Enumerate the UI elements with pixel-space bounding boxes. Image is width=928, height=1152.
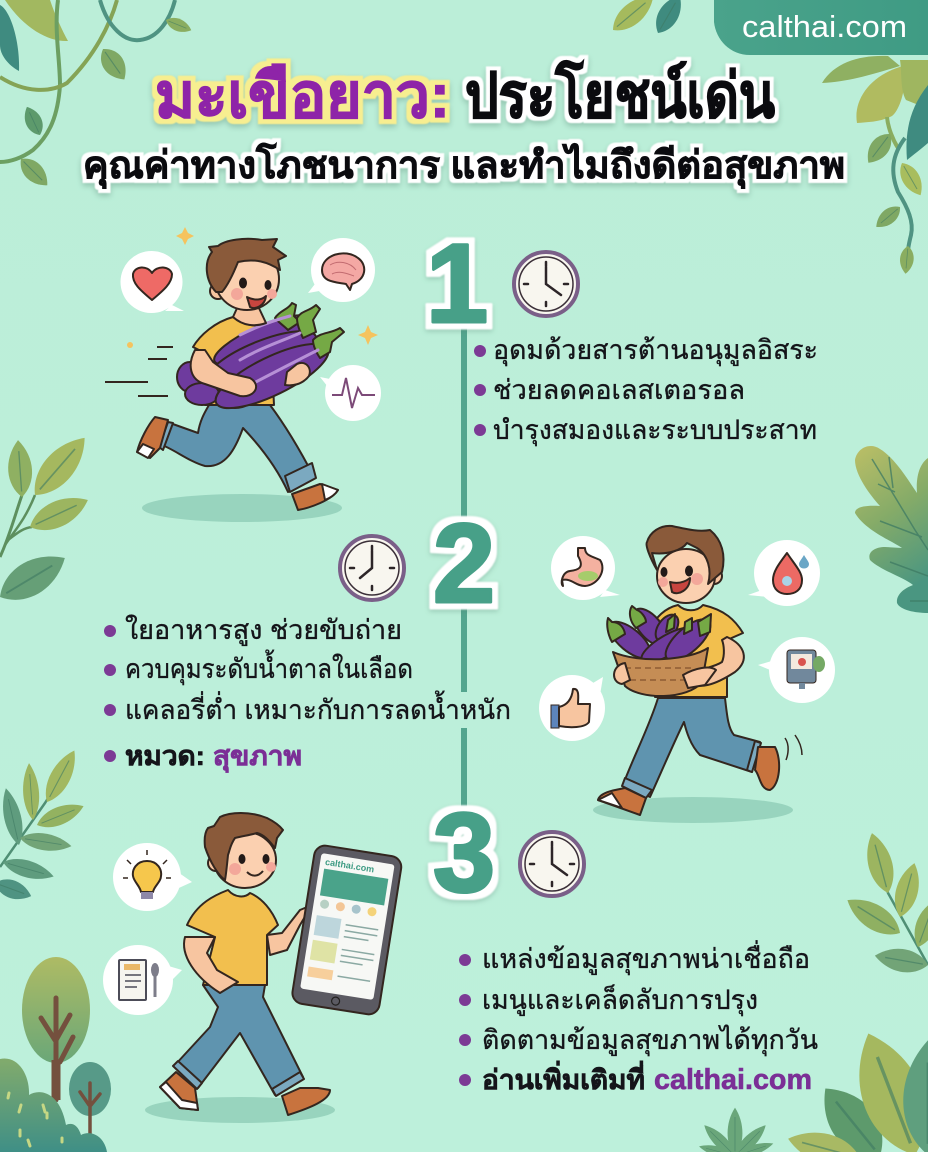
foliage: middle left <box>0 428 96 611</box>
bubble: glucose meter <box>758 637 835 703</box>
section 3 bullets: ติดตามข้อมูลสุขภาพได้ทุกวัน <box>482 1025 818 1057</box>
bubble: light bulb <box>113 843 192 911</box>
bubble: pulse <box>320 365 381 421</box>
foliage: top left vines <box>0 0 194 192</box>
section 2 number: 2 <box>433 501 495 626</box>
brand tab: calthai.com <box>742 9 907 44</box>
section 3 clock <box>520 832 584 896</box>
bubble: recipe book <box>103 945 182 1015</box>
section 2 clock <box>340 536 404 600</box>
title: ประโยชน์เด่น <box>465 59 775 131</box>
sparkles <box>127 227 378 348</box>
bubble: blood drop <box>748 540 820 606</box>
phone <box>291 844 403 1016</box>
section 3 bullets: calthai.com <box>654 1064 812 1096</box>
section 3 bullets: แหล่งข้อมูลสุขภาพน่าเชื่อถือ <box>482 940 810 976</box>
illustration: boy running with eggplants <box>105 227 381 522</box>
bubble: stomach <box>551 536 620 600</box>
title <box>155 59 775 131</box>
subtitle: คุณค่าทางโภชนาการ และทำไมถึงดีต่อสุขภาพ <box>83 142 845 189</box>
bubble: brain <box>308 238 375 302</box>
illustration: boy carrying basket <box>539 526 835 823</box>
foliage: middle right oak leaf <box>855 446 928 613</box>
title: มะเขือยาว: <box>155 62 450 131</box>
section 2 bullets: แคลอรี่ต่ำ เหมาะกับการลดน้ำหนัก <box>125 690 511 725</box>
foliage: bottom right leaves <box>698 1023 928 1152</box>
foliage: lower right sprig <box>841 830 928 976</box>
section 2 bullets: หมวด: <box>125 741 205 771</box>
brand tab <box>714 0 928 55</box>
section 2 bullets: ควบคุมระดับน้ำตาลในเลือด <box>125 649 413 686</box>
section 1 bullets: บำรุงสมองและระบบประสาท <box>493 415 817 447</box>
section 2 bullets <box>104 614 511 773</box>
section 1 clock <box>514 252 578 316</box>
section 3 bullets: เมนูและเคล็ดลับการปรุง <box>482 982 758 1017</box>
section 3 bullets <box>459 940 818 1096</box>
speed lines <box>105 347 173 396</box>
bubble: thumbs up <box>539 675 605 741</box>
foliage: top right leaves and vine <box>606 0 928 274</box>
foliage: bottom left trees and bushes <box>0 957 111 1152</box>
illustration: boy with phone <box>103 813 403 1123</box>
section 3 bullets: อ่านเพิ่มเติมที่ <box>482 1060 645 1095</box>
section 1 number: 1 <box>426 221 488 346</box>
foliage: lower left sprig <box>0 746 87 905</box>
phone: calthai.com <box>324 857 375 874</box>
section 1 bullets: ช่วยลดคอเลสเตอรอล <box>493 375 745 405</box>
bubble: heart <box>121 251 184 313</box>
section 1 bullets <box>474 335 818 447</box>
timeline line <box>461 325 467 813</box>
section 1 bullets: อุดมด้วยสารต้านอนุมูลอิสระ <box>493 335 818 367</box>
section 3 number: 3 <box>433 790 495 915</box>
section 2 bullets: สุขภาพ <box>213 741 302 773</box>
section 2 bullets: ใยอาหารสูง ช่วยขับถ่าย <box>125 614 402 646</box>
